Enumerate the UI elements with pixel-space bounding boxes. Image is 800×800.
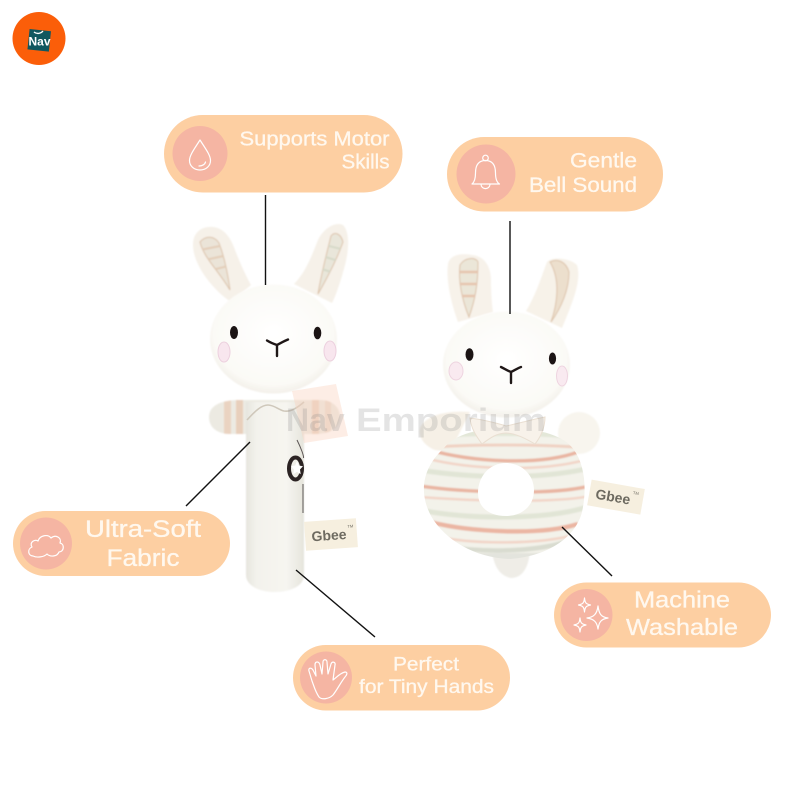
callout: Supports Motor Skills: Supports Motor [240, 128, 390, 150]
arms and stripes [209, 398, 340, 438]
leader line: tiny hands [296, 570, 375, 637]
icon: bell [472, 155, 500, 189]
callout: Ultra-Soft Fabric: Fabric [106, 545, 180, 572]
callout: Machine Washable [554, 582, 771, 648]
striped ring body [424, 432, 585, 559]
tag: TM [633, 490, 639, 496]
product: ring rattle bunny [420, 254, 645, 578]
callout: Supports Motor Skills [164, 115, 402, 192]
tag [587, 480, 645, 515]
right ear [294, 224, 348, 303]
leader line: soft fabric [186, 442, 250, 506]
callout: Machine Washable: Washable [626, 614, 738, 640]
face [218, 326, 336, 362]
handle [246, 402, 304, 592]
left ear [193, 227, 251, 302]
callout: Ultra-Soft Fabric [13, 511, 230, 576]
arms and tail [420, 412, 600, 578]
callout: Perfect for Tiny Hands: Perfect [393, 654, 460, 676]
watermark: Nav Emporium: Emporium [356, 402, 546, 438]
star badge [289, 440, 304, 513]
callout: Supports Motor Skills: Skills [342, 152, 390, 174]
watermark: Nav Emporium: Nav [286, 402, 345, 438]
head [443, 312, 570, 418]
tag [304, 518, 358, 551]
right ear [526, 258, 578, 328]
leader line: motor skills [264, 195, 266, 285]
tag: TM [347, 523, 353, 529]
head [210, 284, 337, 394]
tag: Gbee [311, 526, 347, 544]
callout: Machine Washable: Machine [634, 586, 730, 612]
callout: Gentle Bell Sound: Gentle [570, 150, 637, 172]
callout: Gentle Bell Sound: Bell Sound [529, 174, 637, 197]
icon: cloud [29, 536, 63, 557]
product: stick rattle bunny [193, 224, 358, 592]
bow tie [470, 417, 545, 444]
icon: hand [309, 660, 347, 699]
icon: sparkles [574, 598, 608, 632]
face [449, 348, 568, 386]
leader line: bell sound [509, 221, 511, 314]
callout: Gentle Bell Sound [447, 137, 663, 212]
leader line: machine washable [562, 527, 612, 576]
callout: Perfect for Tiny Hands [293, 645, 510, 710]
callout: Ultra-Soft Fabric: Ultra-Soft [85, 516, 201, 543]
tag: Gbee [594, 486, 632, 508]
logo: Nav badge: Nav [28, 34, 51, 48]
icon: water drop [190, 140, 210, 170]
left ear [447, 254, 493, 322]
collar [247, 402, 304, 420]
logo: Nav badge [12, 12, 66, 65]
callout: Perfect for Tiny Hands: for Tiny Hands [359, 677, 494, 698]
watermark: Nav Emporium [286, 384, 546, 443]
